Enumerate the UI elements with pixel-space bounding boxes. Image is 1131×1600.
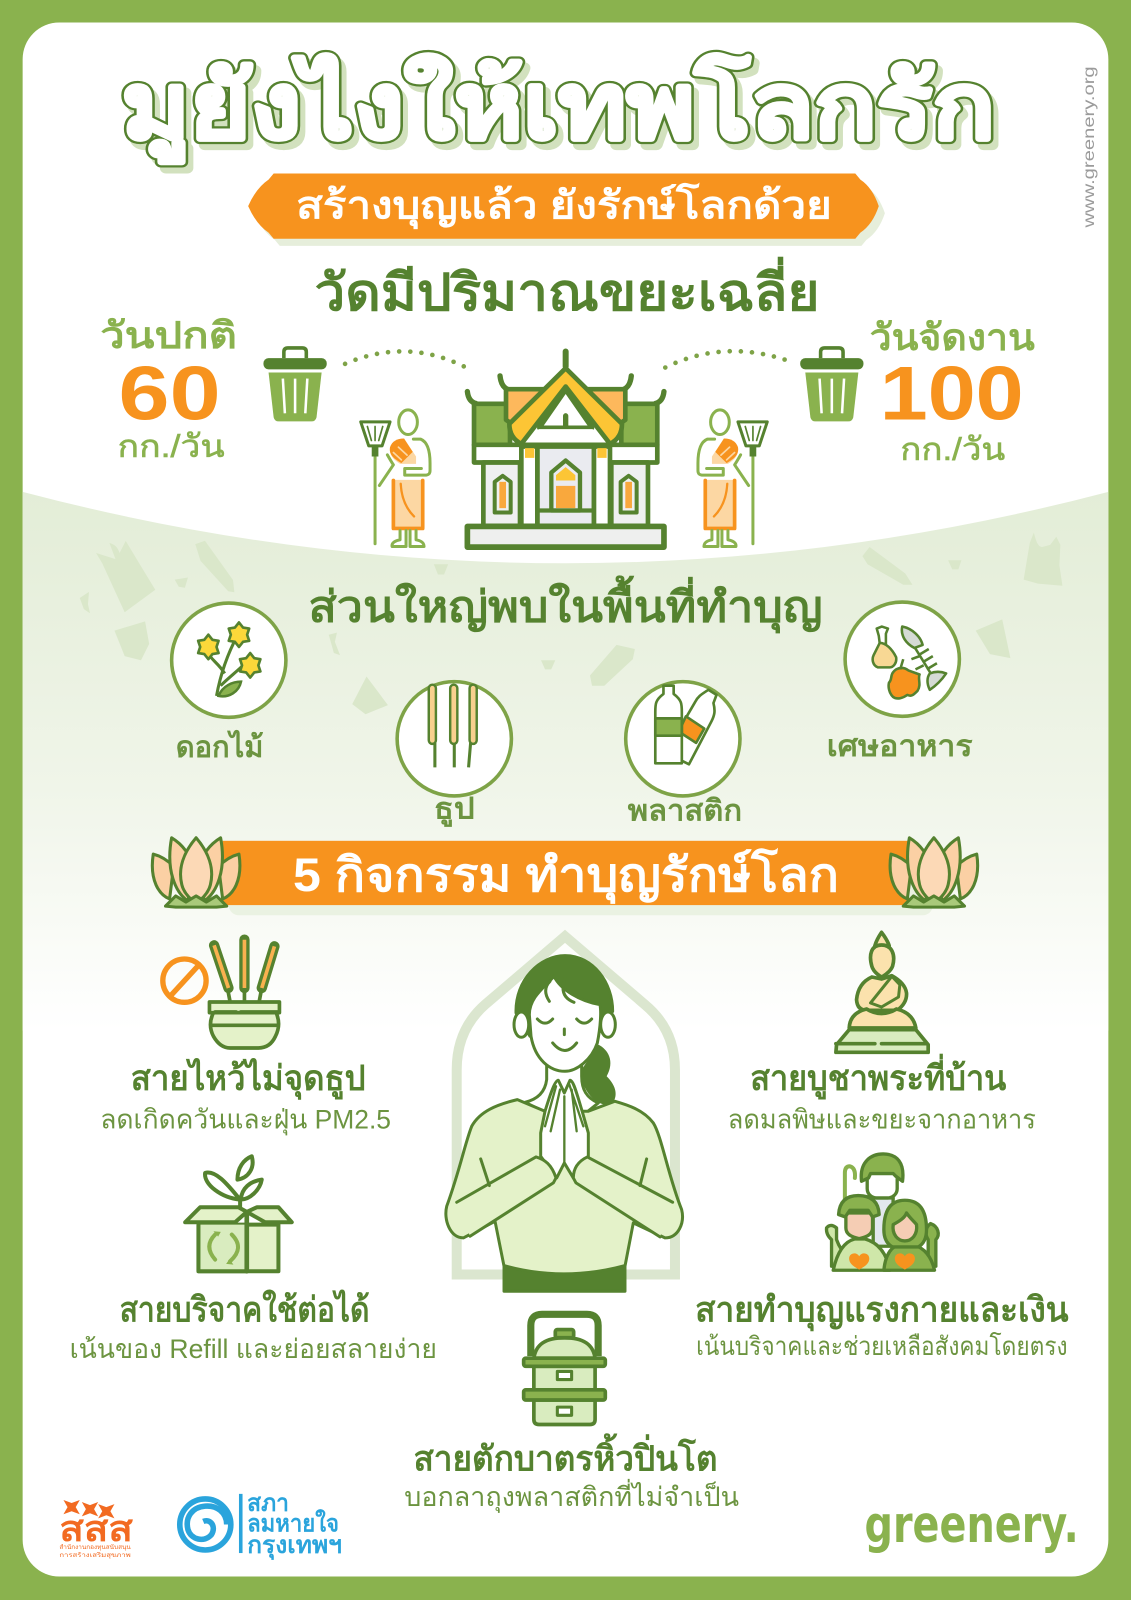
normal day stat: กก./วัน bbox=[118, 428, 225, 464]
icon: monk right bbox=[698, 410, 767, 546]
scattered waste silhouettes bbox=[80, 533, 1062, 714]
logo: Bangkok Breathe Council: กรุงเทพฯ bbox=[247, 1532, 342, 1561]
activity: donate reusable: เน้นของ Refill และย่อยสลายง่าย bbox=[70, 1334, 437, 1364]
item: food waste: เศษอาหาร bbox=[827, 730, 973, 763]
woman praying illustration with arch bbox=[446, 936, 682, 1291]
normal day stat bbox=[100, 315, 237, 464]
activity: donate reusable: สายบริจาคใช้ต่อได้ bbox=[120, 1288, 370, 1329]
icon: volunteers bbox=[826, 1154, 938, 1270]
icon: recycle box with sprout bbox=[185, 1156, 292, 1271]
logo: Bangkok Breathe Council bbox=[180, 1490, 342, 1561]
title: มูยังไงให้เทพโลกรัก bbox=[122, 56, 995, 162]
activity: donate reusable bbox=[70, 1156, 437, 1364]
banner: 5 activities bbox=[223, 841, 933, 915]
activity: tiffin alms bbox=[404, 1314, 739, 1513]
activity: no incense: ลดเกิดควันและฝุ่น PM2.5 bbox=[100, 1105, 391, 1136]
lower pale green wave background bbox=[23, 492, 1108, 1031]
normal day stat: 60 bbox=[119, 351, 221, 436]
logo: ThaiHealth: สำนักงานกองทุนสนับสนุน bbox=[59, 1544, 132, 1551]
item: plastic: พลาสติก bbox=[628, 794, 742, 827]
title: มูยังไงให้เทพโลกรัก bbox=[122, 56, 995, 162]
item: incense: ธูป bbox=[434, 792, 475, 827]
item: flowers bbox=[172, 603, 286, 764]
heading: mostly found: ส่วนใหญ่พบในพื้นที่ทำบุญ bbox=[308, 574, 823, 633]
logo: Bangkok Breathe Council: ลมหายใจ bbox=[247, 1509, 339, 1538]
icon: Buddha statue bbox=[836, 932, 928, 1052]
icon: trash can left bbox=[263, 348, 327, 421]
icon: lotus right bbox=[890, 838, 978, 907]
dotted arc right bbox=[665, 351, 795, 368]
logo: ThaiHealth bbox=[59, 1500, 133, 1559]
temple scene bbox=[345, 351, 795, 547]
logo: ThaiHealth: การสร้างเสริมสุขภาพ bbox=[59, 1552, 131, 1559]
activity: no incense: สายไหว้ไม่จุดธูป bbox=[131, 1057, 366, 1100]
icon: trash can right bbox=[800, 348, 863, 421]
icon: temple bbox=[467, 352, 664, 547]
activity: worship at home: ลดมลพิษและขยะจากอาหาร bbox=[728, 1105, 1036, 1135]
event day stat: กก./วัน bbox=[900, 431, 1005, 467]
activity: worship at home bbox=[728, 932, 1036, 1135]
subtitle banner bbox=[248, 173, 885, 246]
logo: ThaiHealth: สสส bbox=[59, 1509, 133, 1549]
activity: labour and money: เน้นบริจาคและช่วยเหลือสังคมโดยตรง bbox=[696, 1332, 1068, 1361]
icon: tiffin carrier bbox=[524, 1314, 605, 1424]
title: มูยังไงให้เทพโลกรัก bbox=[127, 62, 1000, 168]
banner: 5 activities: 5 กิจกรรม ทำบุญรักษ์โลก bbox=[293, 847, 839, 904]
heading: average waste: วัดมีปริมาณขยะเฉลี่ย bbox=[314, 257, 820, 321]
event day stat: วันจัดงาน bbox=[870, 317, 1035, 358]
arch bbox=[457, 936, 675, 1275]
dotted arc left bbox=[345, 351, 466, 368]
item: plastic bbox=[626, 682, 742, 827]
activity: labour and money bbox=[695, 1154, 1069, 1361]
icon: prohibited incense pot bbox=[163, 940, 279, 1048]
icon: monk left bbox=[361, 410, 430, 546]
item: food waste bbox=[827, 602, 973, 763]
item: incense bbox=[397, 682, 511, 827]
event day stat bbox=[870, 317, 1035, 467]
item: flowers: ดอกไม้ bbox=[176, 729, 263, 764]
activity: tiffin alms: บอกลาถุงพลาสติกที่ไม่จำเป็น bbox=[404, 1479, 739, 1513]
icon: lotus left bbox=[152, 838, 240, 907]
activity: tiffin alms: สายตักบาตรหิ้วปิ่นโต bbox=[413, 1432, 718, 1478]
activity: worship at home: สายบูชาพระที่บ้าน bbox=[750, 1053, 1007, 1100]
activity: labour and money: สายทำบุญแรงกายและเงิน bbox=[695, 1291, 1069, 1331]
logo: Bangkok Breathe Council: สภา bbox=[247, 1490, 289, 1517]
event day stat: 100 bbox=[880, 351, 1024, 436]
vertical website text: www.greenery.org bbox=[1081, 66, 1098, 229]
subtitle banner: สร้างบุญแล้ว ยังรักษ์โลกด้วย bbox=[296, 182, 832, 229]
normal day stat: วันปกติ bbox=[100, 315, 237, 356]
activity: no incense bbox=[100, 940, 391, 1136]
